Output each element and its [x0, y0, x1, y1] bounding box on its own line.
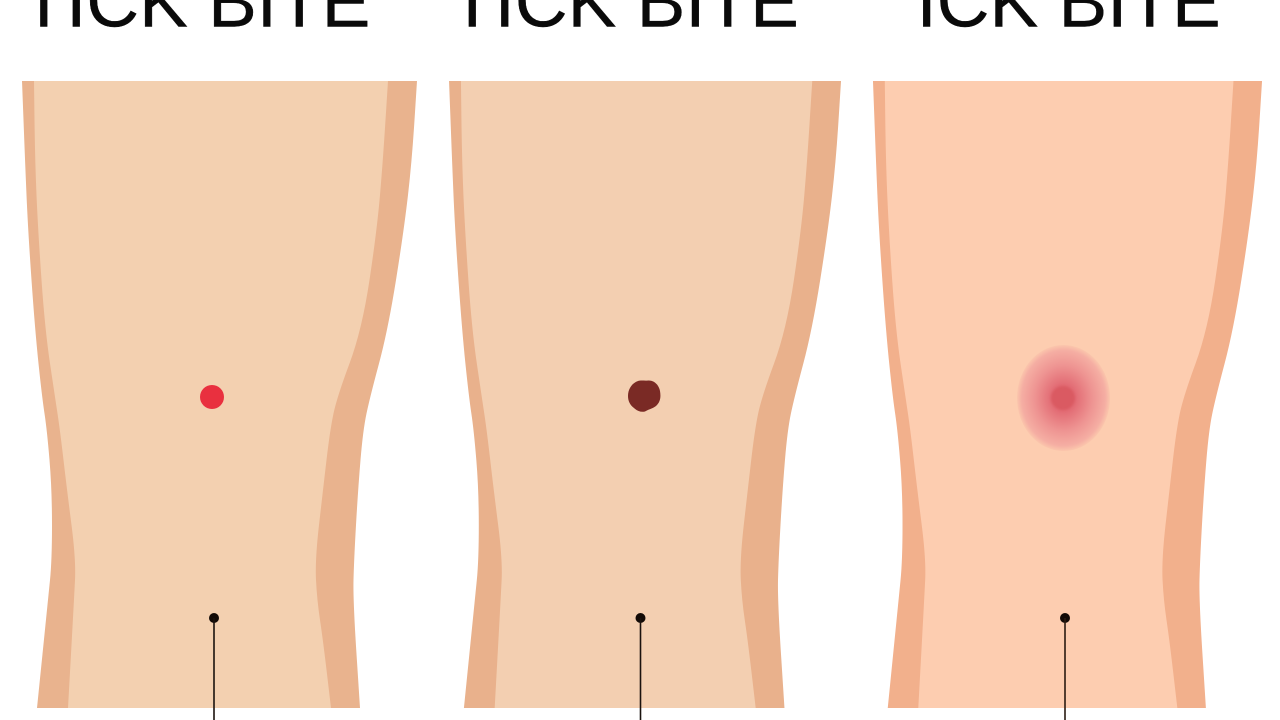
marker dot and leader line [636, 613, 646, 720]
panel: left leg with small red bite [22, 81, 417, 720]
leg inner skin [885, 81, 1233, 708]
leg silhouette [22, 81, 417, 708]
leg silhouette [449, 81, 841, 708]
panel: right leg with spreading rash [873, 81, 1262, 720]
bite: red dot [200, 385, 224, 409]
panel: middle leg with dark scab [449, 81, 841, 720]
bite: rash centre [1051, 386, 1075, 410]
marker dot and leader line [209, 613, 219, 720]
leg inner skin [34, 81, 388, 708]
marker dot and leader line [1060, 613, 1070, 720]
leg inner skin [461, 81, 812, 708]
bite: dark scab [628, 380, 660, 412]
rash halo [1017, 345, 1110, 451]
leg silhouette [873, 81, 1262, 708]
